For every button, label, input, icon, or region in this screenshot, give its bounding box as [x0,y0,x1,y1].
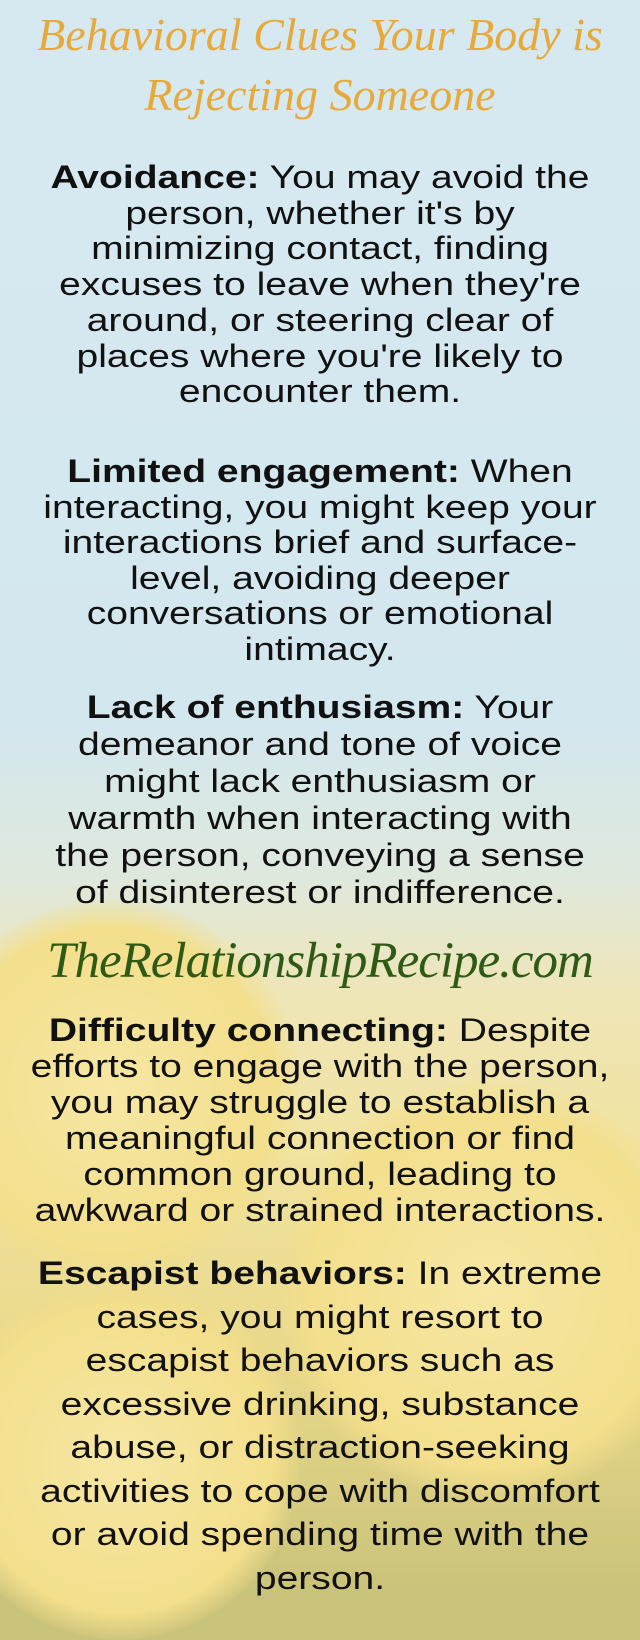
title: Rejecting Someone [144,69,496,120]
text block: limited engagement: level, avoiding deeper [130,560,510,596]
text block: limited engagement: intimacy. [244,631,396,667]
text block: escapist behaviors [38,1255,602,1596]
title: Behavioral Clues Your Body is [37,9,603,60]
text block: escapist behaviors: person. [255,1560,385,1596]
text block: avoidance: excuses to leave when they're [59,266,581,302]
text block: avoidance: encounter them. [179,373,461,409]
text block: difficulty connecting: awkward or strained interactions. [35,1192,605,1228]
text block: avoidance: person, whether it's by [125,195,515,231]
text block: escapist behaviors: or avoid spending time with the [51,1516,589,1552]
text block: escapist behaviors: Escapist behaviors: In extreme [38,1255,602,1291]
text block: avoidance: minimizing contact, finding [91,230,549,266]
text block: escapist behaviors: escapist behaviors such as [86,1342,554,1378]
text block: lack of enthusiasm: the person, conveying a sense [55,837,585,873]
text block: escapist behaviors: excessive drinking, substance [61,1386,579,1422]
text block: avoidance [51,159,589,409]
title [37,9,603,120]
text block: avoidance: places where you're likely to [76,338,564,374]
text block: lack of enthusiasm: might lack enthusiasm or [104,763,536,799]
text block: lack of enthusiasm: demeanor and tone of voice [78,726,562,762]
text block: difficulty connecting: you may struggle to establish a [51,1084,589,1120]
text block: lack of enthusiasm: warmth when interacting with [68,800,572,836]
text block: escapist behaviors: cases, you might resort to [97,1298,543,1334]
text block: escapist behaviors: activities to cope with discomfort [40,1472,600,1508]
text block: lack of enthusiasm: Lack of enthusiasm: Your [87,689,553,725]
text block: limited engagement: Limited engagement: When [67,453,573,489]
text block: limited engagement [43,453,597,667]
text block: difficulty connecting: common ground, leading to [83,1156,557,1192]
text block: limited engagement: conversations or emotional [87,595,553,631]
text block: lack of enthusiasm [55,689,585,910]
text block: limited engagement: interacting, you might keep your [43,489,597,525]
text block: lack of enthusiasm: of disinterest or indifference. [75,874,565,910]
text block: escapist behaviors: abuse, or distraction-seeking [70,1429,570,1465]
text block: avoidance: around, or steering clear of [87,302,553,338]
text block: difficulty connecting: Difficulty connecting: Despite [49,1012,591,1048]
text block: difficulty connecting: efforts to engage with the person, [31,1048,609,1084]
watermark: TheRelationshipRecipe.com [47,933,593,989]
text block: limited engagement: interactions brief and surface- [63,524,577,560]
text block: difficulty connecting [31,1012,609,1228]
text block: difficulty connecting: meaningful connection or find [65,1120,575,1156]
text block: avoidance: Avoidance: You may avoid the [51,159,589,195]
